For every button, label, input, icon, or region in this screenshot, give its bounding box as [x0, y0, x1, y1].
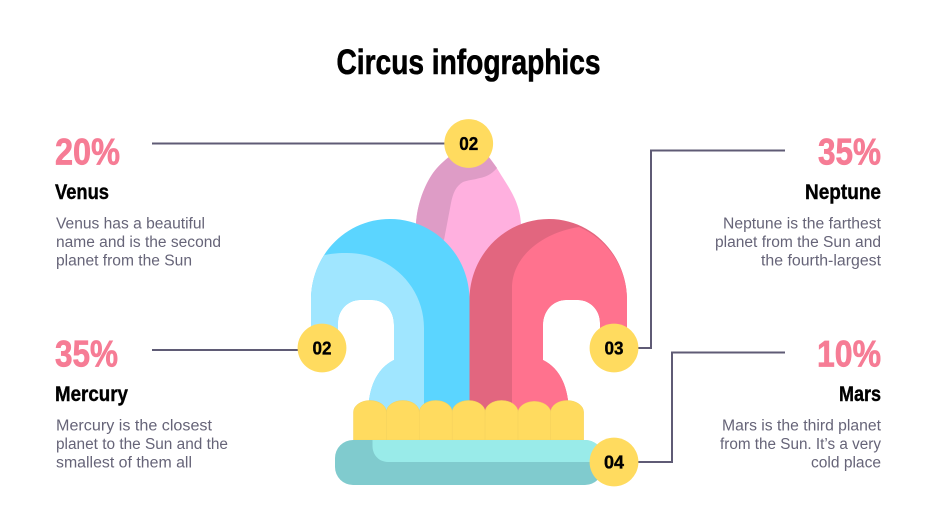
panel: Venus: name and is the second	[56, 234, 221, 251]
panel: Neptune: planet from the Sun and	[715, 234, 881, 251]
hat: pink centre point	[416, 156, 521, 300]
connector: Mars to bottom marker	[637, 352, 785, 462]
panel: Mercury: smallest of them all	[56, 454, 192, 472]
connector: Mercury to left marker	[152, 349, 299, 351]
panel: Mars: from the Sun. It’s a very	[720, 436, 881, 453]
panel: Mars: 10%	[817, 334, 881, 374]
panel: Mercury	[55, 334, 228, 472]
panel: Mercury: Mercury is the closest	[56, 418, 213, 434]
panel: Mars: Mars	[839, 382, 881, 406]
panel: Mercury: 35%	[55, 334, 118, 374]
marker: left 02: 02	[312, 338, 332, 358]
panel: Neptune	[715, 132, 882, 270]
panel: Venus: Venus has a beautiful	[56, 216, 205, 232]
title: Circus infographics	[336, 43, 600, 82]
marker: bottom 04: 04	[604, 452, 625, 472]
panel: Neptune: 35%	[818, 132, 881, 172]
marker: right 03: 03	[604, 338, 624, 358]
marker: bottom 04	[590, 438, 638, 486]
panel: Mercury: Mercury	[55, 382, 128, 406]
hat: red right flap	[470, 219, 627, 416]
panel: Neptune: Neptune	[805, 180, 881, 204]
hat: yellow scalloped band	[354, 400, 584, 440]
marker: right 03	[590, 324, 638, 372]
panel: Venus	[55, 132, 221, 270]
panel: Venus: planet from the Sun	[56, 252, 192, 270]
panel: Mars: cold place	[811, 454, 881, 472]
panel: Neptune: the fourth-largest	[761, 252, 882, 270]
jester hat illustration	[311, 156, 627, 485]
panel: Neptune: Neptune is the farthest	[723, 216, 882, 232]
hat: blue left flap	[311, 219, 470, 416]
marker: top 02: 02	[459, 133, 478, 154]
marker: left 02	[298, 324, 346, 372]
panel: Venus: Venus	[55, 180, 109, 204]
panel: Venus: 20%	[55, 132, 120, 172]
connector: Neptune to right marker	[637, 150, 785, 348]
marker: top 02	[444, 119, 493, 168]
panel: Mercury: planet to the Sun and the	[56, 436, 228, 453]
panel: Mars	[720, 334, 882, 472]
panel: Mars: Mars is the third planet	[722, 418, 882, 434]
hat: teal brim	[335, 440, 604, 485]
connector: Venus to top marker	[152, 142, 446, 144]
